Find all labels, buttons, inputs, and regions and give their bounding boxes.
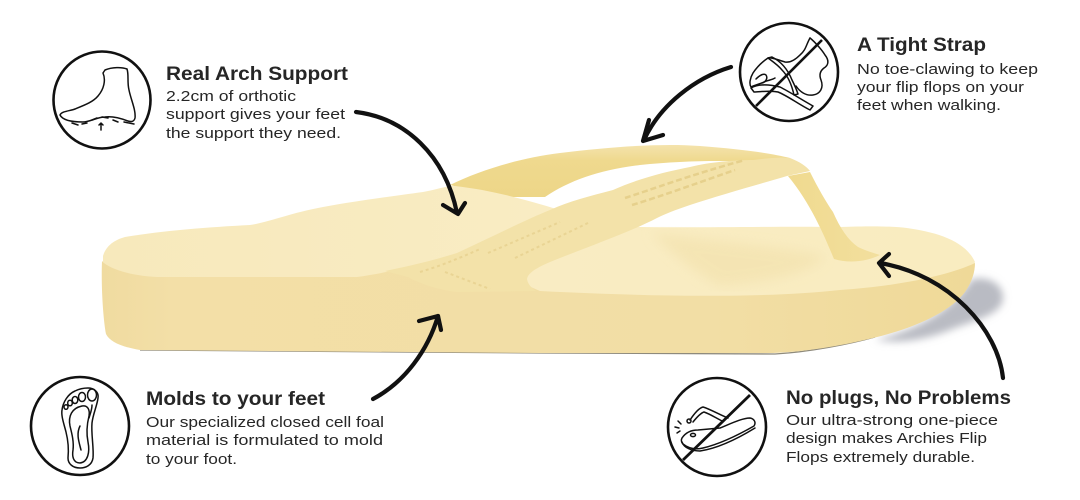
- description: 2.2cm of orthotic: [166, 88, 297, 105]
- heading: Molds to your feet: [146, 388, 326, 410]
- description: material is formulated to mold: [146, 432, 383, 449]
- strap embossed pattern: [420, 222, 590, 289]
- feature: no plugs, no problems: [668, 378, 1011, 476]
- arrow: molds to your feet: [373, 316, 441, 399]
- front strap: [385, 158, 810, 292]
- shaded footbed near toe post: [650, 232, 825, 286]
- flip flop product illustration: [102, 145, 1003, 354]
- arrow: tight strap: [643, 67, 731, 141]
- toe post: [788, 172, 880, 262]
- icon: foot with crossed-out strap: [740, 23, 838, 121]
- description: the support they need.: [166, 125, 341, 142]
- feature: a tight strap: [740, 23, 1038, 121]
- description: to your foot.: [146, 451, 237, 468]
- thin contact shadow: [140, 337, 875, 354]
- feature: molds to your feet: [31, 377, 384, 475]
- strap logo emboss: [625, 160, 745, 205]
- description: [166, 88, 346, 142]
- description: [786, 412, 998, 466]
- icon: crossed-out flip flop: [668, 378, 766, 476]
- arrow: arch support: [356, 112, 465, 214]
- description: Flops extremely durable.: [786, 449, 975, 466]
- sole top surface: [103, 186, 975, 296]
- description: feet when walking.: [857, 97, 1001, 114]
- arrow: no plugs: [879, 254, 1003, 378]
- description: Our specialized closed cell foal: [146, 414, 384, 431]
- description: design makes Archies Flip: [786, 430, 987, 447]
- icon: foot arch: [54, 52, 150, 148]
- description: your flip flops on your: [857, 79, 1024, 96]
- description: Our ultra-strong one-piece: [786, 412, 998, 429]
- heading: A Tight Strap: [857, 34, 986, 56]
- shadow under toe of sandal: [875, 278, 1003, 342]
- back strap: [450, 145, 790, 197]
- sole side wall: [102, 255, 975, 353]
- icon: footprint: [31, 377, 129, 475]
- feature: real arch support: [54, 52, 349, 148]
- heading: No plugs, No Problems: [786, 387, 1011, 409]
- heading: Real Arch Support: [166, 63, 349, 85]
- description: [857, 61, 1038, 114]
- description: support gives your feet: [166, 106, 346, 123]
- description: [146, 414, 384, 468]
- description: No toe-clawing to keep: [857, 61, 1038, 78]
